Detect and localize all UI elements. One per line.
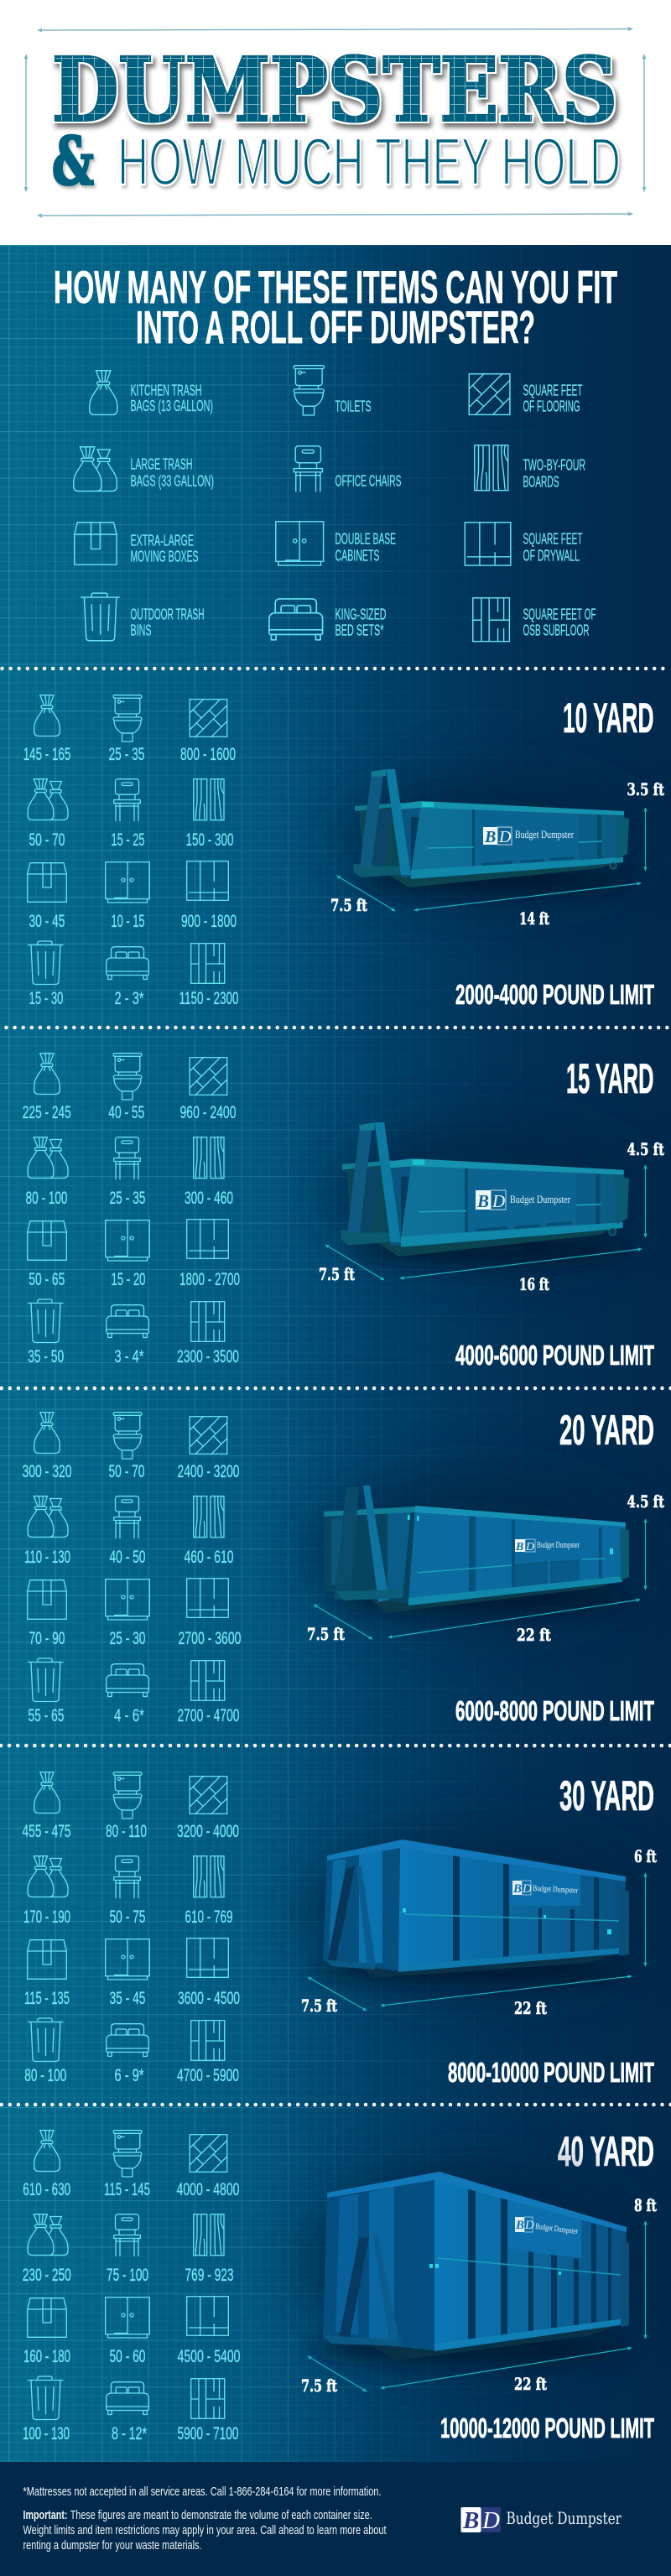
trash bins: 15 - 30 [29,989,64,1008]
panel: 15 yard [23,1054,665,1371]
moving boxes: 115 - 135 [24,1989,70,2008]
boards: 150 - 300 [186,830,233,850]
large bags: 170 - 190 [23,1907,70,1927]
flooring [176,2135,240,2199]
office chairs [111,779,144,850]
footnote: important: These figures are meant to demonstrate the volume of each container size. [70,2508,372,2522]
footnote: important [23,2508,387,2553]
arrow: height [644,1165,646,1237]
legend: office chairs: OFFICE CHAIRS [336,473,401,490]
legend: two-by-four boards: TWO-BY-FOUR [523,456,585,473]
toilets: 50 - 70 [109,1462,144,1481]
logo: Budget Dumpster [515,828,575,840]
osb subfloor: 2700 - 4700 [178,1706,240,1725]
legend: outdoor trash bins: OUTDOOR TRASH [131,606,205,622]
legend: large trash bags [74,447,214,491]
legend: outdoor trash bins [81,593,205,641]
kitchen bags: 610 - 630 [23,2180,70,2199]
logo [515,1539,580,1553]
dimension: length: 22 ft [514,2374,548,2394]
large bags: 50 - 70 [29,830,65,850]
kitchen bags: 225 - 245 [23,1103,71,1122]
boards [185,1496,233,1567]
footnote: mattresses: *Mattresses not accepted in all service areas. Call 1-866-284-6164 for more information. [23,2485,381,2499]
toilets: 40 - 55 [108,1103,144,1122]
footer logo: B [462,2507,479,2534]
dimension: length: 14 ft [519,908,550,929]
flooring [179,1058,237,1122]
title: ampersand: & [52,122,94,200]
footnote: important: Weight limits and item restrictions may apply in your area. Call ahead to learn more about [23,2523,387,2537]
flooring [177,1777,239,1841]
drywall: 3600 - 4500 [178,1989,240,2008]
office chairs: 40 - 50 [109,1548,146,1567]
legend: moving boxes: EXTRA-LARGE [131,532,194,549]
logo: Budget Dumpster [537,1541,580,1550]
panel: 20 yard [22,1407,665,1726]
cabinets: 35 - 45 [109,1989,146,2008]
legend: osb subfloor: OSB SUBFLOOR [523,622,590,639]
logo: B [512,1882,522,1896]
bed sets: 2 - 3* [114,989,144,1008]
legend: moving boxes: MOVING BOXES [131,549,198,565]
logo: Budget Dumpster [533,1884,579,1896]
dumpster: 10 yard [336,769,654,906]
item grid: 30 yard quantities [22,1772,240,2085]
legend: drywall: SQUARE FEET [523,530,582,547]
large bags [24,1496,70,1567]
arrow: right measure [643,55,645,191]
bed sets: 8 - 12* [112,2424,147,2443]
trash bins: 35 - 50 [28,1347,64,1366]
large bags: 80 - 100 [25,1189,67,1208]
moving boxes [23,2298,70,2366]
boards [185,1856,233,1927]
large bags [23,2214,71,2285]
drywall: 1800 - 2700 [179,1270,240,1289]
moving boxes: 30 - 45 [29,912,65,931]
boards: 300 - 460 [185,1189,233,1208]
toilets [106,1772,147,1841]
footer band [0,2462,671,2576]
toilets [109,1413,144,1481]
kitchen bags: 145 - 165 [23,745,70,764]
large bags: 110 - 130 [24,1548,70,1567]
arrow: length [381,1976,632,2006]
toilets [104,2131,150,2199]
legend: flooring: OF FLOORING [523,398,580,414]
cabinets [106,2298,149,2366]
logo: B [484,828,496,846]
arrow: length [388,1600,640,1637]
legend: kitchen trash bags: BAGS (13 GALLON) [131,398,213,414]
kitchen bags [22,1772,70,1841]
legend: toilets [294,366,371,415]
kitchen bags [23,695,70,764]
legend: large trash bags: LARGE TRASH [131,456,193,473]
legend: double base cabinets: CABINETS [336,547,379,564]
legend: drywall: OF DRYWALL [523,547,580,564]
arrow: bottom measure [38,214,632,216]
osb subfloor: 4700 - 5900 [177,2066,239,2085]
moving boxes: 50 - 65 [29,1270,65,1289]
bed sets [107,1664,148,1725]
legend: king-sized bed sets [269,599,386,640]
legend: double base cabinets [276,522,396,565]
flooring: 3200 - 4000 [177,1822,239,1841]
footnote: important: Important: [23,2508,67,2522]
panel: 30 yard [22,1772,658,2088]
arrow: width [325,1245,384,1280]
bed sets [107,2382,148,2443]
osb subfloor: 1150 - 2300 [179,989,238,1008]
logo: Budget Dumpster [535,2222,579,2236]
dimension: width: 7.5 ft [301,2376,338,2396]
arrow: width [314,1605,372,1639]
logo [483,827,575,846]
flooring: 960 - 2400 [179,1103,237,1122]
panel: 40 yard [23,2128,658,2443]
legend: outdoor trash bins: BINS [131,622,151,639]
legend: toilets: TOILETS [336,398,371,414]
kitchen bags [23,2131,70,2199]
dimension: width: 7.5 ft [319,1264,356,1284]
arrow: height [644,808,646,871]
bed sets: 3 - 4* [114,1347,144,1366]
boards: 769 - 923 [185,2266,233,2285]
dimension: width: 7.5 ft [330,895,368,915]
logo [476,1190,571,1211]
drywall [178,1939,240,2008]
arrow: length [400,1249,642,1278]
arrow: length [414,883,641,910]
boards [185,2214,233,2285]
dumpster: 20 yard [306,1472,650,1631]
drywall [178,1579,242,1648]
logo: D [525,1541,534,1553]
osb subfloor: 2300 - 3500 [177,1347,239,1366]
large bags: 230 - 250 [23,2266,71,2285]
drywall: 900 - 1800 [181,912,237,931]
office chairs [109,1856,146,1927]
boards: 460 - 610 [185,1548,233,1567]
legend: large trash bags: BAGS (33 GALLON) [131,473,214,490]
dimension: height: 6 ft [634,1846,658,1866]
dimension: height: 8 ft [634,2195,658,2215]
bed sets [107,1305,148,1366]
arrow: top measure [38,29,632,30]
flooring: 4000 - 4800 [176,2180,240,2199]
osb subfloor [177,1302,239,1366]
arrow: height [644,2221,646,2339]
drywall [179,1220,240,1289]
cabinets [106,1579,149,1648]
arrow: height [644,1519,646,1590]
footer logo [461,2507,622,2534]
moving boxes: 70 - 90 [29,1629,65,1648]
boards: 610 - 769 [185,1907,233,1927]
logo: B [476,1191,489,1211]
logo: D [492,1191,505,1211]
arrow: height [644,1873,646,1966]
boards [185,1137,233,1208]
bed sets [107,2024,148,2085]
dimension: width: 7.5 ft [301,1996,338,2016]
trash bins: 55 - 65 [29,1706,64,1725]
flooring: 2400 - 3200 [178,1462,240,1481]
legend: two-by-four boards [475,445,585,491]
legend: moving boxes [75,523,198,565]
arrow: length [381,2348,632,2388]
legend: double base cabinets: DOUBLE BASE [336,530,396,547]
legend: osb subfloor: SQUARE FEET OF [523,606,596,622]
dumpster: 15 yard [327,1120,654,1271]
osb subfloor: 5900 - 7100 [178,2424,238,2443]
panel: legend [74,366,596,642]
logo: Budget Dumpster [510,1193,571,1205]
legend: kitchen trash bags: KITCHEN TRASH [131,382,201,399]
large bags [23,1856,70,1927]
logo: B [515,2219,524,2232]
office chairs: 15 - 25 [111,830,144,850]
toilets: 25 - 35 [109,745,144,764]
logo: D [522,1882,532,1896]
flooring [180,700,236,764]
legend: flooring: SQUARE FEET [523,382,582,399]
drywall [181,861,237,931]
toilets: 115 - 145 [104,2180,150,2199]
drywall: 2700 - 3600 [178,1629,242,1648]
heading [54,261,617,353]
white title band [0,0,671,245]
office chairs [109,1496,146,1567]
moving boxes [28,863,66,931]
dimension: width: 7.5 ft [307,1624,346,1644]
moving boxes [28,1221,66,1289]
bed sets: 4 - 6* [114,1706,144,1725]
item grid: 20 yard quantities [22,1413,242,1725]
dumpster: 40 yard [298,2160,658,2370]
legend: king-sized bed sets: BED SETS* [336,622,384,639]
logo: D [524,2219,534,2232]
moving boxes: 160 - 180 [23,2347,70,2366]
dimension: length: 22 ft [517,1625,552,1645]
trash bins [28,1299,64,1366]
osb subfloor [179,944,238,1008]
toilets [108,1054,144,1122]
cabinets: 25 - 30 [109,1629,146,1648]
item grid: 10 yard quantities [23,695,238,1008]
bed sets [107,947,148,1008]
moving boxes [24,1940,70,2008]
arrow: width [308,2356,367,2391]
office chairs: 25 - 35 [109,1189,146,1208]
trash bins [23,2376,70,2443]
toilets: 80 - 110 [106,1822,147,1841]
cabinets [106,1220,149,1289]
trash bins: 100 - 130 [23,2424,70,2443]
kitchen bags: 300 - 320 [22,1462,72,1481]
cabinets: 50 - 60 [109,2347,146,2366]
footer logo: D [481,2507,500,2534]
footnote: important: renting a dumpster for your waste materials. [23,2538,201,2553]
office chairs [107,2214,148,2285]
office chairs: 50 - 75 [109,1907,146,1927]
legend: kitchen trash bags [90,371,213,414]
kitchen bags: 455 - 475 [22,1822,70,1841]
legend: king-sized bed sets: KING-SIZED [336,606,386,622]
kitchen bags [22,1413,72,1481]
osb subfloor [178,1661,240,1725]
drywall: 4500 - 5400 [178,2347,240,2366]
arrow: width [337,876,395,911]
legend: two-by-four boards: BOARDS [523,473,559,490]
office chairs [109,1137,146,1208]
logo: D [498,828,512,846]
flooring [178,1417,240,1481]
large bags [25,1137,68,1208]
cabinets: 15 - 20 [111,1270,146,1289]
legend: osb subfloor [473,598,596,642]
cabinets [106,862,149,931]
legend: office chairs [294,446,401,492]
dimension: length: 22 ft [514,1998,548,2018]
boards [186,779,233,850]
kitchen bags [23,1054,71,1122]
office chairs: 75 - 100 [107,2266,148,2285]
osb subfloor [177,2021,239,2085]
bed sets: 6 - 9* [114,2066,144,2085]
flooring: 800 - 1600 [180,745,236,764]
cabinets [106,1939,149,2008]
dimension: length: 16 ft [519,1274,550,1294]
logo [515,2217,579,2236]
moving boxes [28,1580,66,1648]
panel: 10 yard [23,695,665,1010]
trash bins: 80 - 100 [24,2066,66,2085]
large bags [28,779,68,850]
trash bins [28,941,64,1008]
trash bins [28,1658,64,1725]
legend: drywall [465,523,582,565]
osb subfloor [178,2379,238,2443]
cabinets: 10 - 15 [111,912,144,931]
drywall [178,2297,240,2366]
logo [512,1881,579,1896]
item grid: 40 yard quantities [23,2131,241,2443]
logo: B [515,1541,523,1553]
item grid: 15 yard quantities [23,1054,240,1366]
arrow: width [308,1977,367,2011]
legend: flooring [469,374,582,414]
trash bins [24,2018,66,2085]
arrow: left measure [25,55,27,191]
footer logo: Budget Dumpster [507,2508,622,2528]
dumpster: 30 yard [298,1824,658,2001]
toilets [109,695,144,764]
